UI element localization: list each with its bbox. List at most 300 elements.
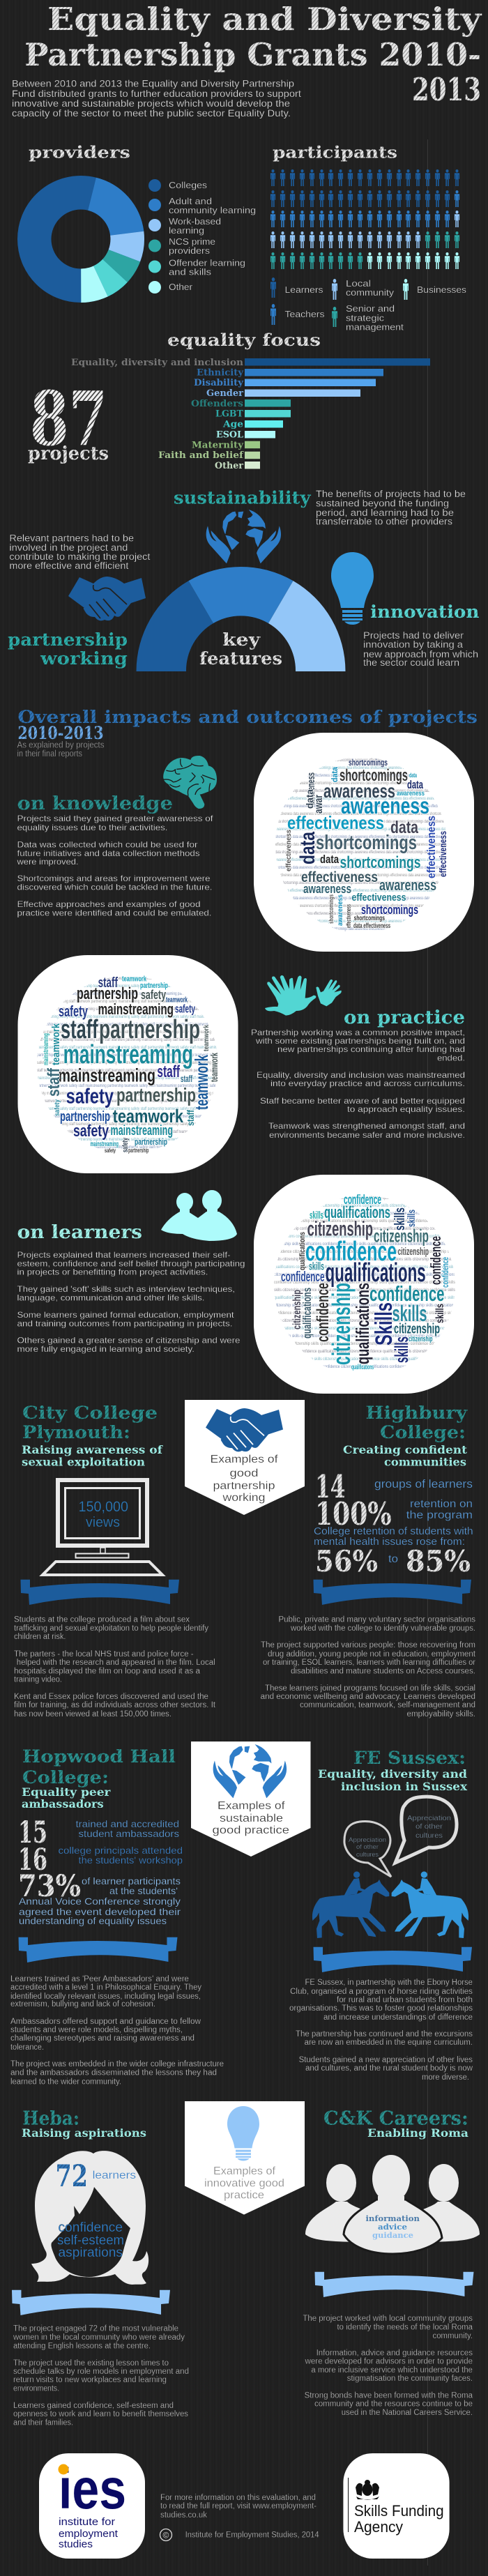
stats: agreed the event developed their — [19, 1906, 181, 1917]
text block — [10, 1975, 224, 2086]
banner: innovative good practice: innovative good — [204, 2177, 284, 2189]
word cloud: learners: qualifications — [298, 1232, 307, 1270]
text block: and increase understandings of difference — [323, 2013, 473, 2022]
stat: 87 projects: projects — [28, 443, 109, 464]
text block: drug addition, young people not in education, employment — [268, 1650, 476, 1659]
panel: on practice — [18, 955, 465, 1173]
text block: and training outcomes from participating in projects. — [17, 1319, 233, 1329]
case study: C&K Careers: C&K Careers: — [323, 2108, 468, 2130]
text block: training video. — [14, 1676, 62, 1684]
feature: partnership working: more effective and efficient — [9, 561, 129, 571]
word cloud: practice: teamwork — [208, 1053, 220, 1082]
bar chart: Maternity — [192, 441, 243, 450]
word cloud: learners: qualifications — [352, 1283, 373, 1364]
text block: attending English lessons at the centre. — [13, 2342, 151, 2351]
logo: ies: institute for — [59, 2517, 115, 2528]
word cloud: practice: teamwork — [113, 1106, 184, 1127]
feature: partnership working: Relevant partners had to be — [9, 533, 134, 544]
text block: Partnership working was a common positive impact, — [251, 1028, 465, 1037]
word cloud: practice: mainstreaming — [91, 1141, 119, 1148]
text block: and economic wellbeing and advocacy. Learners developed — [261, 1693, 475, 1701]
word cloud: learners: citizenship — [327, 1283, 356, 1365]
word cloud: practice: mainstreaming — [98, 1000, 174, 1018]
word cloud: practice: partnership — [77, 984, 138, 1003]
participants legend: Senior and — [346, 303, 395, 314]
word cloud: practice: staff — [98, 975, 118, 991]
word cloud: knowledge: shortcomings — [328, 894, 335, 924]
word cloud: practice: partnership teamwork safety staff mainstreaming partnership teamwork safety staff mainstreaming partnership teamwork safety — [37, 1083, 219, 1088]
word cloud: learners: skills — [310, 1210, 323, 1221]
text block — [251, 1028, 465, 1140]
text block: new partnerships continuing after funding had — [277, 1044, 465, 1054]
speech bubbles: cultures — [415, 1831, 443, 1840]
footer text: Institute for Employment Studies, 2014 — [185, 2531, 319, 2539]
case study: Hopwood Hall College: Equality peer — [22, 1785, 111, 1799]
case study: Highbury College: Creating confident — [343, 1443, 468, 1456]
speech bubbles: of other — [415, 1822, 443, 1831]
text block: employability skills. — [407, 1710, 475, 1718]
text block: Equality, diversity and inclusion was mainstreamed — [257, 1070, 465, 1080]
text block: into everyday practice and across curriculums. — [270, 1079, 465, 1088]
donut legend: Offender learning — [169, 258, 245, 268]
word cloud: knowledge: effectiveness — [285, 830, 293, 871]
case study: Heba: Heba: — [22, 2108, 79, 2130]
text block: Projects explained that learners increased their self- — [17, 1250, 231, 1260]
stats: college principals attended — [59, 1845, 183, 1856]
banner: innovative good practice — [185, 2101, 305, 2215]
text block: Kent and Essex police forces discovered and used the — [14, 1693, 208, 1701]
text block — [14, 1616, 216, 1718]
donut legend: Other — [169, 282, 193, 292]
feature: innovation — [331, 552, 480, 668]
word cloud: practice: safety mainstreaming staff teamwork partnership safety mainstreaming staff teamwork partnership safety mainstreaming staff — [37, 1030, 218, 1035]
ribbon — [313, 1580, 471, 1605]
text block: The partnership has continued and the excursions — [296, 2030, 473, 2038]
text block: and their families. — [13, 2419, 73, 2428]
text block: Learners trained as 'Peer Ambassadors' and were — [10, 1975, 189, 1983]
word cloud: knowledge: effectiveness — [301, 869, 378, 885]
case study: Highbury College: communities — [384, 1456, 466, 1469]
text block: disabilities and mature students on Access courses. — [291, 1668, 475, 1676]
feature: partnership working: contribute to making the project — [9, 551, 151, 562]
word cloud: practice — [18, 955, 238, 1173]
stats: Annual Voice Conference strongly — [19, 1896, 181, 1907]
heading: participants: participants — [273, 144, 397, 162]
text block: with some existing partnerships being built on, and — [255, 1036, 465, 1046]
panel: on knowledge: on knowledge — [17, 793, 173, 814]
case study: FE Sussex: inclusion in Sussex — [341, 1780, 468, 1793]
word cloud: practice: safety mainstreaming staff teamwork partnership safety mainstreaming staff teamwork partnership safety mainstreaming staff — [37, 1122, 218, 1127]
text block: more fully engaged in learning and society. — [17, 1344, 195, 1354]
text block — [16, 814, 213, 918]
icon: woman's hair with words: learners — [93, 2170, 136, 2181]
text block: The parters - the local NHS trust and police force - — [14, 1650, 194, 1659]
donut legend: NCS prime — [169, 236, 215, 247]
bar chart: Disability — [194, 378, 243, 388]
icon: two horses with riders — [312, 1871, 468, 1938]
word cloud: knowledge: awareness — [379, 876, 436, 894]
icon: royal crest — [356, 2480, 379, 2500]
word cloud: practice: mainstreaming safety staff partnership teamwork mainstreaming safety staff partnership teamwork safety staff mainstreaming — [37, 1014, 218, 1019]
footer text: studies.co.uk — [160, 2511, 207, 2520]
intro text: capacity of the sector to meet the public sector Equality Duty. — [12, 107, 291, 119]
text block — [261, 1616, 476, 1718]
text block — [289, 1979, 473, 2082]
word cloud: learners: citizenship — [374, 1226, 429, 1247]
stats — [314, 1468, 473, 1578]
banner: good partnership working: partnership — [213, 1480, 275, 1492]
text block: for rural and urban students from both — [337, 1996, 473, 2004]
feature: sustainability: The benefits of projects had to be — [316, 489, 466, 499]
case study: City College Plymouth: Plymouth: — [22, 1422, 130, 1442]
speech bubbles: of other — [356, 1843, 379, 1851]
word cloud: practice: partnership teamwork safety staff mainstreaming partnership teamwork safety staff mainstreaming partnership teamwork safety — [37, 1145, 219, 1150]
bar chart: Age — [222, 420, 243, 429]
case study: Highbury College: College: — [380, 1422, 466, 1442]
word cloud: practice: safety mainstreaming staff teamwork partnership safety mainstreaming staff teamwork partnership safety mainstreaming staff — [37, 999, 218, 1004]
panel: on learners: on learners — [17, 1222, 142, 1243]
word cloud: practice: staff — [185, 1110, 196, 1126]
text block: Projects said they gained greater awareness of — [17, 814, 213, 823]
icon: computer with 150,000 views: views — [86, 1515, 120, 1530]
logo: ies: ies — [59, 2457, 126, 2521]
word cloud: knowledge: effectiveness — [345, 904, 352, 928]
text block: in projects or benefitting from project activities. — [17, 1267, 208, 1277]
word cloud: practice: mainstreaming safety staff partnership teamwork mainstreaming safety staff partnership teamwork safety staff mainstreaming — [37, 1076, 218, 1081]
case study: FE Sussex: Equality, diversity and — [318, 1767, 467, 1781]
text block — [17, 1250, 245, 1354]
feature: sustainability: sustainability — [174, 488, 312, 508]
word cloud: practice: staff — [61, 1015, 98, 1044]
section heading: overall impacts — [17, 707, 478, 759]
word cloud: learners: skills — [392, 1301, 427, 1326]
stats: 85% — [406, 1544, 471, 1578]
word cloud: practice: partnership — [128, 1147, 149, 1154]
text block: Information, advice and guidance resources — [317, 2349, 473, 2358]
word cloud: practice: partnership — [116, 1084, 196, 1106]
case study: City College Plymouth — [14, 1403, 216, 1718]
icon: computer with 150,000 views: 150,000 — [78, 1499, 128, 1515]
label: key features: features — [199, 648, 282, 669]
text block: discovered which could be tackled in the future. — [17, 883, 212, 892]
word cloud: learners: Skills — [371, 1302, 397, 1346]
donut legend: and skills — [169, 266, 212, 277]
case study: C&K Careers — [303, 2108, 480, 2417]
donut chart — [34, 192, 128, 286]
word cloud: learners — [254, 1175, 474, 1394]
case study: City College Plymouth: City College — [22, 1403, 158, 1423]
case study: City College Plymouth: sexual exploitation — [22, 1456, 145, 1469]
text block: FE Sussex, in partnership with the Ebony Horse — [305, 1979, 473, 1987]
word cloud: knowledge: shortcomings — [316, 832, 417, 854]
word cloud: practice: safety — [105, 1148, 116, 1154]
banner: sustainable good practice: Examples of — [218, 1800, 285, 1812]
text block: students and were role models, dispelling myths, — [10, 2026, 183, 2034]
banner: good partnership working — [185, 1400, 305, 1515]
footer text: © — [163, 2531, 169, 2540]
case study: FE Sussex — [289, 1748, 473, 2082]
text block: environments became safer and more inclusive. — [269, 1130, 465, 1140]
icon: handshake — [68, 577, 146, 620]
word cloud: practice: partnership — [60, 1109, 110, 1125]
word cloud: practice: safety — [175, 1003, 195, 1016]
word cloud: learners: citizenship — [307, 1218, 373, 1241]
text block: accredited with a level 1 in Philosophical Enquiry. They — [10, 1983, 201, 1992]
icon: hands — [265, 975, 342, 1016]
stats: retention on — [410, 1498, 473, 1510]
text block: film for training, as did individuals across other sectors. It — [14, 1701, 216, 1709]
word cloud: practice: partnership — [99, 1015, 200, 1044]
text block: helped with the research and appeared in the film. Local — [17, 1659, 215, 1667]
case study: City College Plymouth: Raising awareness of — [22, 1443, 163, 1456]
icon: woman's hair with words: 72 — [56, 2159, 88, 2194]
case study: Hopwood Hall College — [10, 1746, 224, 2086]
title: Partnership Grants 2010- — [24, 36, 481, 73]
word cloud: knowledge — [254, 733, 474, 952]
text block: more diverse. — [422, 2073, 469, 2082]
stat: 87 projects: 87 — [30, 376, 107, 463]
text block: has now been viewed at least 150,000 times. — [14, 1710, 171, 1718]
word cloud: practice: mainstreaming — [63, 1040, 193, 1069]
ribbon — [12, 2290, 170, 2315]
word cloud: knowledge: effectiveness — [437, 831, 448, 877]
word cloud: practice: safety mainstreaming staff teamwork partnership safety mainstreaming staff teamwork partnership safety mainstreaming staff — [37, 1091, 218, 1096]
text block: Staff became better aware of and better equipped — [260, 1096, 465, 1106]
word cloud: knowledge: data effectiveness — [353, 922, 390, 930]
word cloud: knowledge: awareness — [305, 772, 317, 805]
banner: sustainable good practice: good practice — [212, 1824, 289, 1836]
case study: Heba — [12, 2108, 189, 2428]
text block: Public, private and many voluntary sector organisations — [279, 1616, 475, 1624]
word cloud: practice: mainstreaming safety staff partnership teamwork mainstreaming safety staff partnership teamwork safety staff mainstreaming — [37, 1106, 218, 1111]
icon: globe in hands — [206, 510, 281, 563]
word cloud: practice: mainstreaming safety staff partnership teamwork mainstreaming safety staff partnership teamwork safety staff mainstreaming — [37, 984, 218, 989]
stats: trained and accredited — [75, 1818, 179, 1829]
word cloud: knowledge: awareness — [341, 793, 429, 818]
text block: Strong bonds have been formed with the Roma — [305, 2392, 473, 2400]
icon: woman's hair with words — [31, 2151, 148, 2285]
panel: providers — [29, 144, 256, 294]
footer text: to read the full report, visit www.employment- — [160, 2502, 317, 2510]
banner: good partnership working: working — [222, 1492, 265, 1504]
word cloud: knowledge: effectiveness — [287, 812, 384, 833]
donut legend: providers — [169, 245, 211, 256]
speech bubbles: cultures — [356, 1851, 379, 1859]
text block: organisations. This was to foster good relationships — [289, 2004, 473, 2013]
text block: Shortcomings and areas for improvement were — [17, 874, 211, 883]
text block: The project engaged 72 of the most vulnerable — [13, 2325, 178, 2333]
text block: Effective approaches and examples of good — [17, 899, 201, 909]
donut legend: Work-based — [169, 216, 221, 227]
text block: The project was embedded in the wider college infrastructure — [10, 2060, 224, 2068]
word cloud: learners: skills — [309, 1261, 324, 1273]
word cloud: learners: confidence — [305, 1237, 397, 1267]
text block: and the ambassadors disseminated the lessons they had — [10, 2069, 217, 2078]
text block: and cultures, and the rural student body is now — [305, 2064, 473, 2073]
logo: ies — [39, 2453, 145, 2559]
icon: brain — [162, 756, 217, 809]
text block: schedule talks by role models in employment and — [13, 2368, 189, 2376]
intro text: innovative and sustainable projects which would develop the — [12, 98, 290, 109]
icon: globe in hands — [213, 1744, 287, 1798]
word cloud: practice: partnership — [135, 1136, 167, 1147]
word cloud: knowledge: data — [304, 789, 315, 809]
text block: are now an embedded in the equine curriculum. — [305, 2038, 473, 2047]
text block: openness to work and learn to benefit themselves — [13, 2410, 188, 2418]
footer — [39, 2453, 450, 2559]
word cloud: practice: staff teamwork partnership mainstreaming safety staff teamwork partnership mainstreaming safety staff teamwork partnership safety — [37, 1099, 219, 1104]
word cloud: knowledge: shortcomings — [354, 915, 385, 922]
word cloud: practice: partnership teamwork safety staff mainstreaming partnership teamwork safety staff mainstreaming partnership teamwork safety — [37, 1053, 219, 1058]
case study: C&K Careers: Enabling Roma — [367, 2126, 468, 2140]
word cloud: knowledge: data — [330, 767, 340, 782]
feature: innovation: innovation — [370, 602, 480, 622]
participants legend: community — [346, 287, 395, 298]
stats: 100% — [315, 1495, 392, 1532]
stats: of learner participants — [82, 1875, 181, 1887]
stats: 56% — [315, 1544, 378, 1578]
icon: two learners — [161, 1190, 237, 1241]
label: key features — [199, 630, 282, 669]
stats: 16 — [18, 1843, 47, 1877]
text block: extremism, bullying and lack of cohesion. — [10, 2000, 155, 2009]
logo: ies: studies — [59, 2539, 93, 2550]
word cloud: practice: mainstreaming — [59, 1065, 155, 1086]
word cloud: learners: citizenship — [394, 1322, 440, 1337]
text block: used in the National Careers Service. — [342, 2409, 473, 2417]
case study: Highbury College — [261, 1403, 476, 1718]
case study: Highbury College: Highbury — [365, 1403, 468, 1423]
word cloud: learners: citizenship — [291, 1290, 303, 1329]
donut legend: community learning — [169, 205, 256, 215]
word cloud: knowledge: data — [409, 772, 418, 779]
word cloud: learners: confidence — [440, 1257, 450, 1288]
feature: sustainability: transferrable to other providers — [316, 517, 452, 527]
banner: innovative good practice: Examples of — [213, 2165, 276, 2177]
speech bubbles: Appreciation — [407, 1814, 451, 1822]
word cloud: practice: safety — [59, 1003, 89, 1020]
donut legend: Adult and — [169, 196, 212, 206]
word cloud: practice: partnership — [140, 982, 168, 990]
feature: partnership working — [8, 533, 151, 669]
heading: equality focus: equality focus — [167, 330, 321, 350]
feature: sustainability — [174, 488, 466, 563]
text block: to approach equality issues. — [347, 1104, 465, 1114]
word cloud: knowledge: shortcomings — [361, 903, 418, 917]
bar chart: ESOL — [216, 429, 243, 441]
word cloud: learners: qualifications — [351, 1364, 374, 1371]
text block: Others gained a greater sense of citizenship and were — [17, 1336, 241, 1346]
text block: These learners joined programs focused on life skills, social — [265, 1684, 475, 1693]
text block: community. — [432, 2332, 473, 2340]
word cloud: practice: teamwork — [50, 1023, 62, 1065]
word cloud: learners: skills — [392, 1207, 408, 1230]
word cloud: knowledge: effectiveness — [351, 892, 406, 904]
word cloud: practice: mainstreaming safety staff partnership teamwork mainstreaming safety staff partnership teamwork safety staff mainstreaming — [37, 1045, 218, 1050]
word cloud: practice: teamwork — [122, 975, 147, 984]
text block: a more inclusive service which understood the — [311, 2366, 473, 2375]
banner: good partnership working: good — [230, 1468, 258, 1479]
word cloud: knowledge: shortcomings — [349, 757, 388, 768]
word cloud: practice: partnership teamwork safety staff mainstreaming partnership teamwork safety staff mainstreaming partnership teamwork safety — [37, 1022, 219, 1027]
word cloud: practice: teamwork — [166, 996, 188, 1005]
word cloud: learners: confidence — [429, 1236, 444, 1285]
panel: participants — [270, 144, 467, 332]
text block: equality issues due to their activities. — [17, 823, 167, 832]
banner: innovative good practice: practice — [224, 2189, 264, 2202]
text block: The project used the existing lesson times to — [13, 2359, 169, 2368]
case study: FE Sussex: FE Sussex: — [353, 1748, 466, 1768]
icon: woman's hair with words: aspirations — [59, 2246, 123, 2260]
icon: woman's hair with words: self-esteem — [57, 2234, 124, 2248]
intro text — [12, 78, 301, 119]
text block: hospitals displayed the film on loop and used it as a — [14, 1668, 201, 1676]
text block — [303, 2315, 473, 2417]
logo: Skills Funding Agency: Agency — [354, 2518, 403, 2536]
stats: the students' workshop — [78, 1854, 183, 1866]
word cloud: practice: staff — [45, 1067, 63, 1097]
panel: on practice: on practice — [344, 1007, 465, 1028]
panel: on learners — [17, 1175, 474, 1394]
text block: worked with the college to identify vulnerable groups. — [290, 1624, 475, 1633]
text block: Data was collected which could be used for — [17, 840, 198, 850]
word cloud: practice: staff — [157, 1062, 181, 1081]
banner: good partnership working: Examples of — [211, 1454, 278, 1465]
footer text — [160, 2494, 319, 2540]
word cloud: knowledge: data — [390, 818, 419, 837]
semicircle diagram — [137, 567, 346, 671]
feature: sustainability: sustained beyond the funding — [316, 498, 449, 509]
label: key features: key — [222, 630, 261, 650]
feature: innovation: new approach from which — [363, 649, 478, 660]
text block: Ambassadors offered support and guidance to fellow — [10, 2018, 201, 2026]
logo: ies: employment — [59, 2529, 118, 2540]
donut legend — [148, 179, 256, 294]
word cloud: practice: safety mainstreaming staff teamwork partnership safety mainstreaming staff teamwork partnership safety mainstreaming staff — [37, 1060, 218, 1065]
icon: woman's hair with words: confidence — [59, 2220, 123, 2235]
text block: communication, teamwork, self-management and — [300, 1701, 475, 1709]
word cloud: learners: citizenship — [409, 1335, 433, 1343]
banner: sustainable good practice: sustainable — [220, 1813, 283, 1824]
icon: three people: information — [365, 2214, 420, 2223]
word cloud: practice: staff teamwork partnership mainstreaming safety staff teamwork partnership mainstreaming safety staff teamwork partnership safety — [37, 1068, 219, 1073]
text block: to identify the needs of the local Roma — [337, 2324, 473, 2332]
stats: student ambassadors — [78, 1828, 179, 1839]
panel: key features — [8, 488, 480, 671]
text block: The project worked with local community groups — [303, 2315, 473, 2323]
speech bubbles — [344, 1797, 457, 1877]
bar chart: Faith and belief — [158, 450, 244, 461]
icon: handshake — [206, 1408, 283, 1451]
icon: light bulb — [331, 552, 374, 625]
word cloud: practice: staff teamwork partnership mainstreaming safety staff teamwork partnership mainstreaming safety staff teamwork partnership safety — [37, 1129, 219, 1134]
text block: were improved. — [16, 857, 78, 867]
participants legend — [270, 277, 467, 332]
bar chart: Ethnicity — [197, 368, 243, 378]
word cloud: learners: skills — [391, 1336, 412, 1363]
word cloud: learners: confidence — [344, 1193, 381, 1207]
text block: trafficking and sexual exploitation to help people identify — [14, 1624, 208, 1633]
section heading: overall impacts: in their final reports — [17, 748, 82, 759]
word cloud: learners: skills — [434, 1304, 446, 1323]
panel: on knowledge — [16, 733, 474, 952]
word cloud: knowledge: data — [320, 853, 339, 866]
feature: partnership working: involved in the project and — [9, 542, 128, 553]
stats: the program — [406, 1509, 473, 1521]
word cloud: practice: safety — [121, 1137, 130, 1152]
case study: Hopwood Hall College: College: — [22, 1767, 109, 1788]
word cloud: knowledge: effectiveness — [425, 816, 438, 878]
